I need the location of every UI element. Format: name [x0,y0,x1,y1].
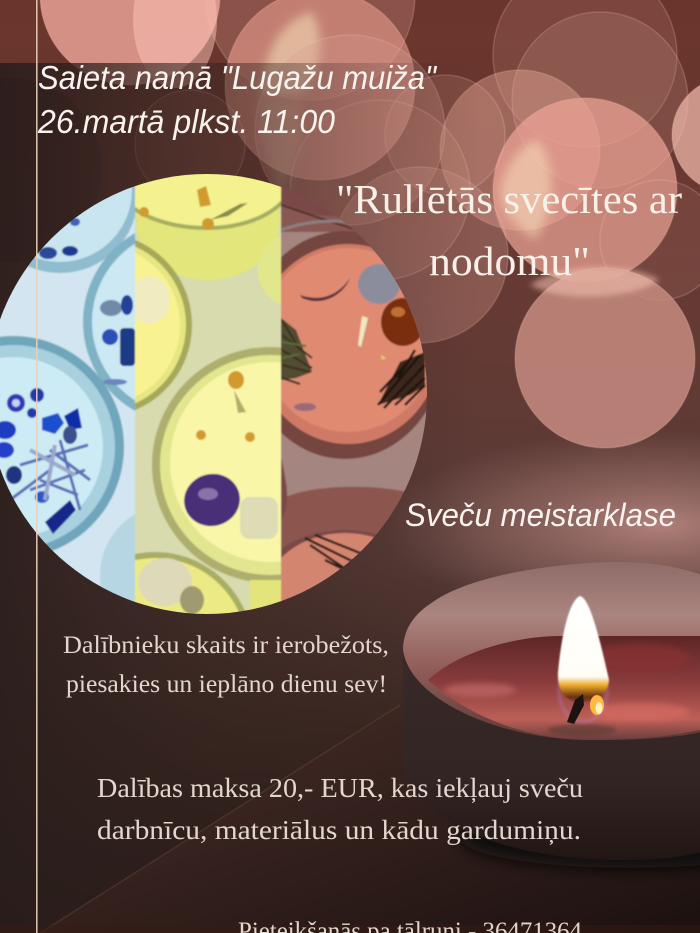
location and time [37,59,437,140]
title: "Rullētās svecītes ar [336,176,682,222]
flame [558,596,609,702]
candle [403,562,700,868]
amethyst stone [183,473,241,528]
dark overlay band [0,63,480,933]
subtitle: Sveču meistarklase [405,497,676,533]
photo: yellow candles [134,174,282,614]
photo circle [0,174,427,614]
title [336,176,682,284]
participants note: piesakies un ieplāno dienu sev! [66,671,387,698]
location and time: 26.martā plkst. 11:00 [37,103,336,140]
title: nodomu" [429,238,590,284]
participants note [63,632,389,698]
flame glow [559,658,607,722]
candle rim [403,562,700,740]
candle body [403,650,700,860]
photo: orange candles [280,186,427,602]
vertical line [36,0,38,933]
candle shadow [460,808,700,868]
price note: darbnīcu, materiālus un kādu gardumiņu. [97,815,581,845]
bokeh lights [40,0,700,448]
stones and herbs [358,264,400,304]
dried flowers [139,186,255,442]
price note [97,773,584,845]
location and time: Saieta namā "Lugažu muiža" [38,59,437,96]
candle wax pool [428,636,700,740]
participants note: Dalībnieku skaits ir ierobežots, [63,632,389,659]
blue stones [0,218,135,534]
price note: Dalības maksa 20,- EUR, kas iekļauj sveču [97,773,584,803]
table surface [0,700,700,933]
wick [567,694,584,724]
photo: blue candles [0,186,136,602]
